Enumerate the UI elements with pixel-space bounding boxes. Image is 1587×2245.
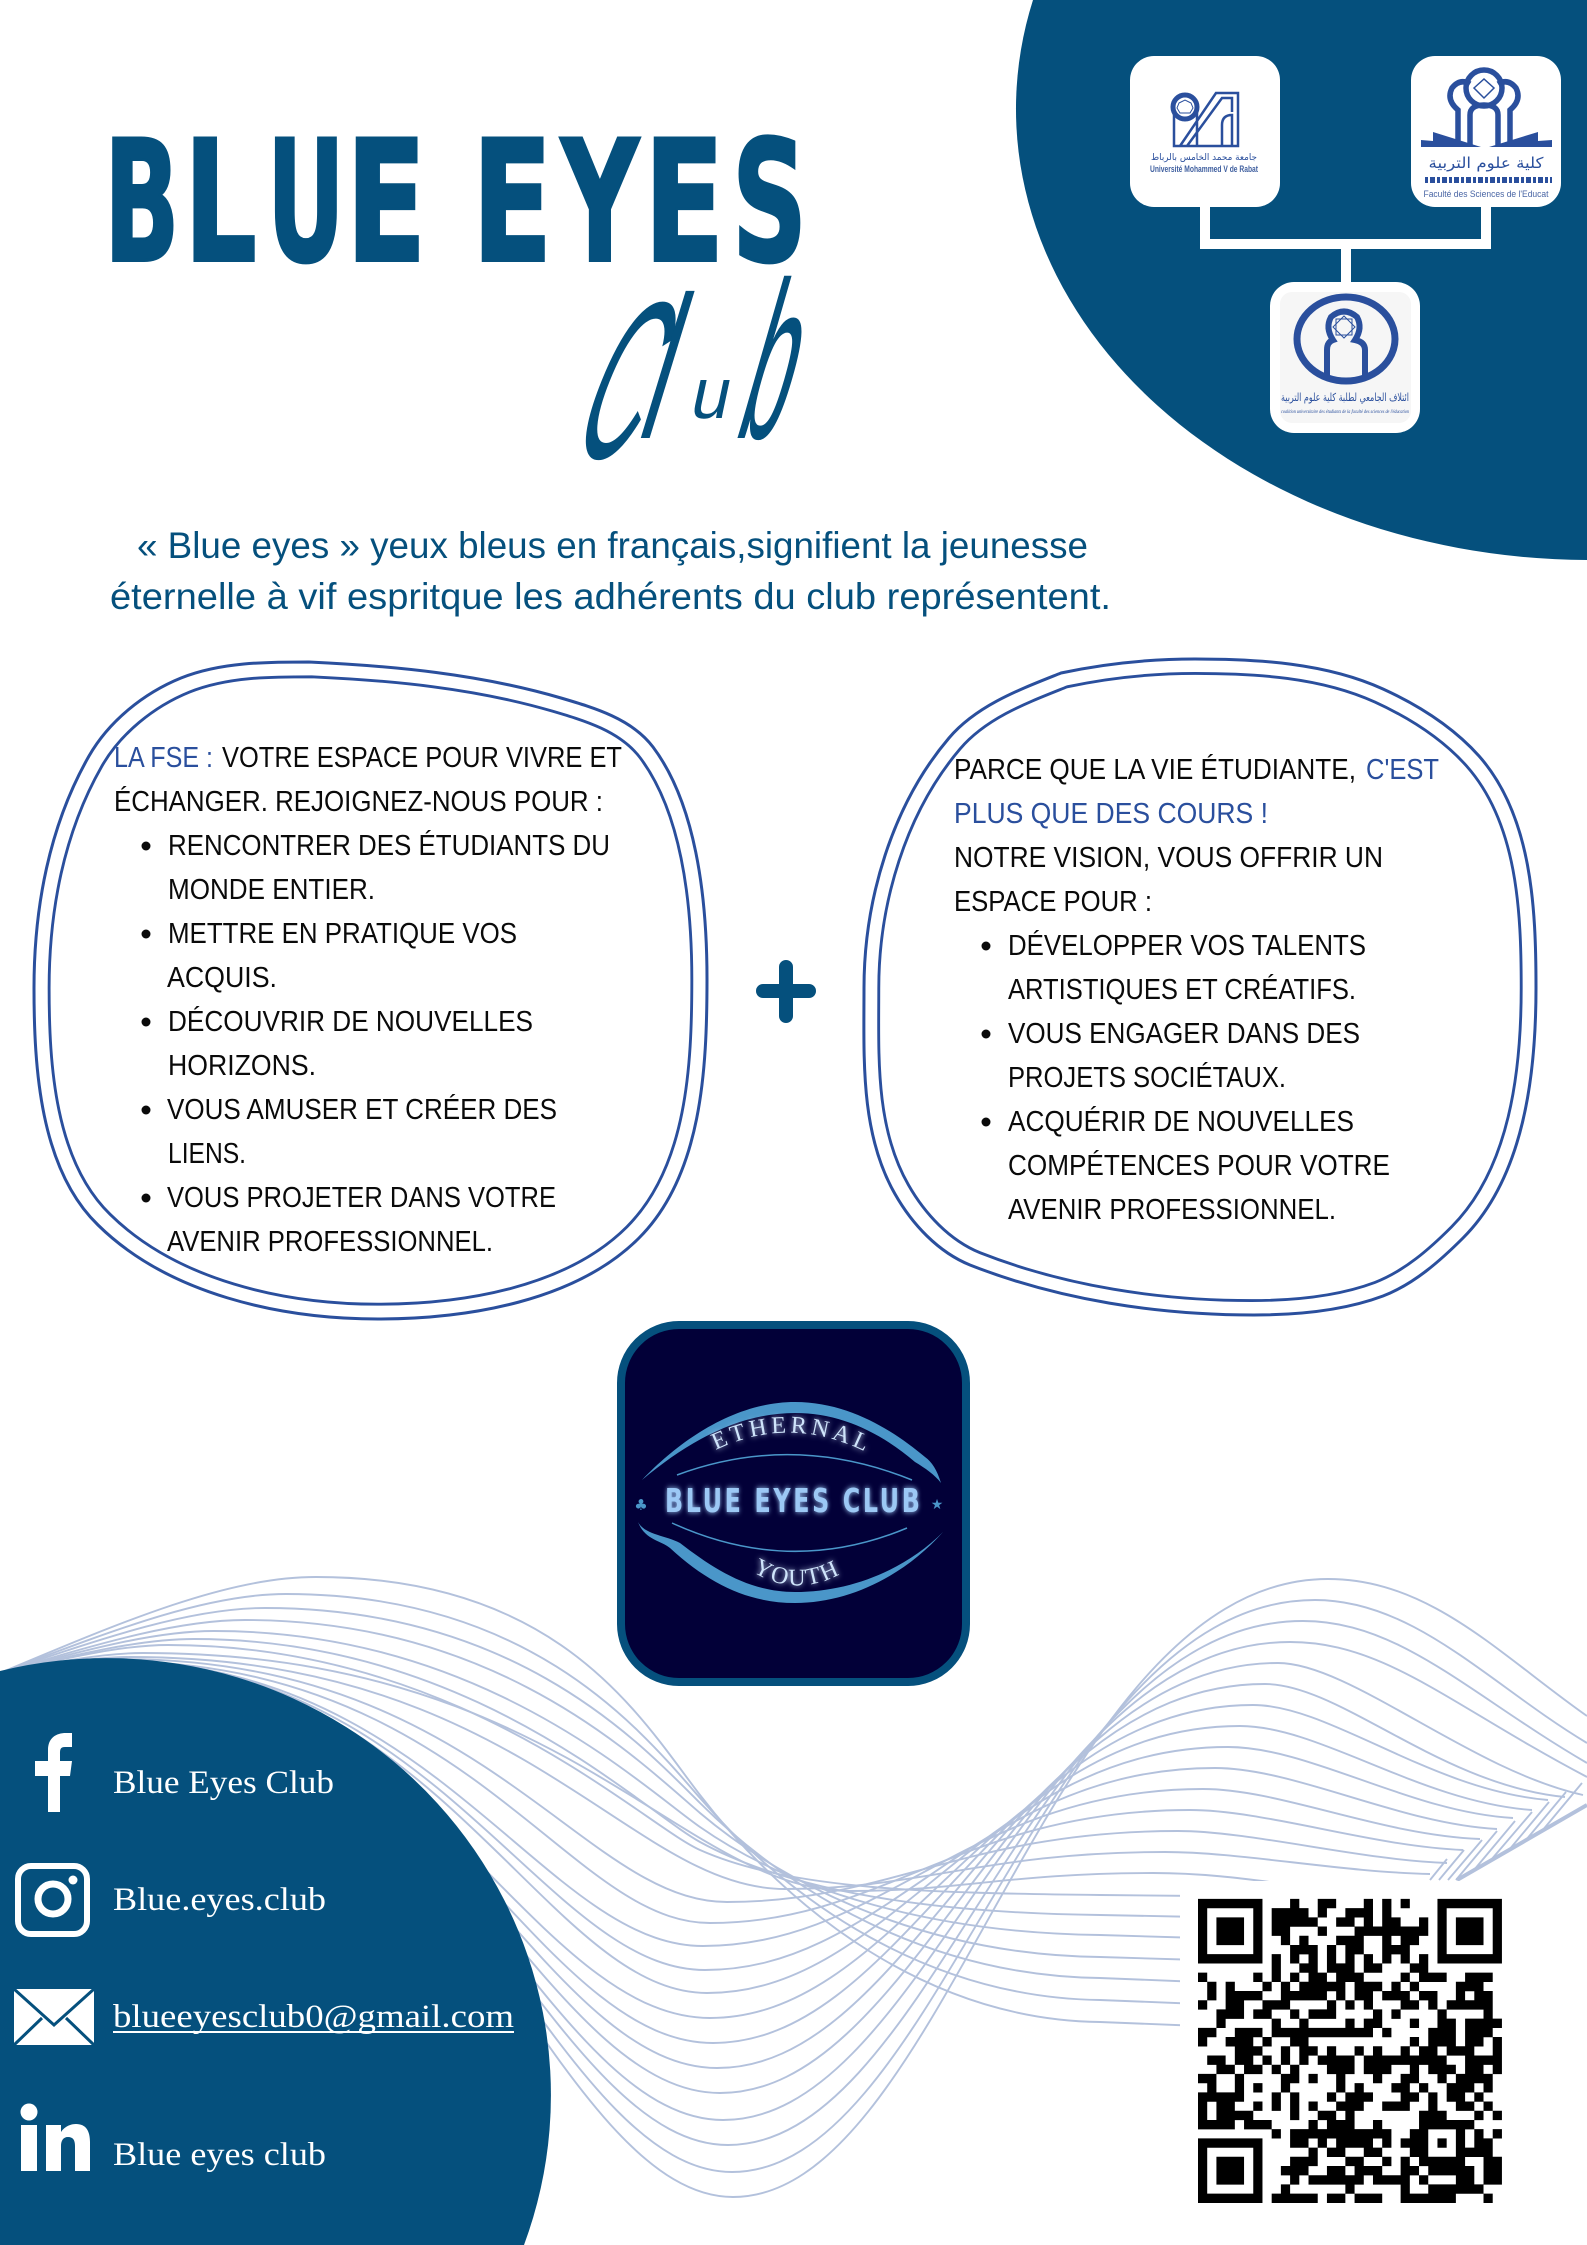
club logo: ETHERNAL [708,1413,868,1454]
panel: QR background [1180,1881,1587,2245]
logo tile: Université Mohammed V de Rabat: Université Mohammed V de Rabat [1150,164,1258,174]
panel: top right circle [1016,0,1587,560]
panel: vision blob: COMPÉTENCES POUR VOTRE [1008,1149,1390,1182]
title: S [732,104,807,300]
panel: vision blob: C'EST [1366,754,1439,786]
title: L [184,105,257,300]
logo tile: Université Mohammed V de Rabat [1130,56,1280,207]
panel: vision blob: PARCE QUE LA VIE ÉTUDIANTE, [954,753,1356,786]
panel: FSE blob: METTRE EN PRATIQUE VOS [168,918,517,950]
logo tile: coalition universitaire [1270,282,1420,433]
panel: FSE blob: AVENIR PROFESSIONNEL. [167,1226,493,1258]
panel: vision blob: PLUS QUE DES COURS ! [954,798,1268,830]
panel: FSE blob: ACQUIS. [167,962,277,994]
icon: envelope [14,1989,94,2045]
club logo: BLUE EYES CLUB [665,1481,920,1520]
title script: Club: C [547,257,710,506]
panel: vision blob [864,659,1536,1315]
title: E [346,105,426,301]
title [104,104,807,301]
logo tile: Université Mohammed V de Rabat: جامعة محمد الخامس بالرباط [1151,153,1257,163]
panel: vision blob: ACQUÉRIR DE NOUVELLES [1008,1105,1354,1138]
logo tile: Faculté des Sciences de l'Education [1411,56,1561,207]
icon: facebook [35,1733,72,1812]
title: E [644,105,724,301]
club logo: YOUTH [754,1555,842,1590]
text: facebook: Blue Eyes Club [113,1765,334,1801]
text: linkedin: Blue eyes club [113,2137,326,2173]
club logo [617,1321,970,1686]
panel: vision blob: VOUS ENGAGER DANS DES [1008,1018,1360,1050]
title script: Club: l [621,256,712,482]
logo tile: coalition universitaire: coalition universitaire des étudiants de la faculté des sciences de l'éducation [1281,410,1409,415]
panel: vision blob: PROJETS SOCIÉTAUX. [1008,1061,1286,1094]
title script: Club [547,236,837,506]
icon: linkedin [20,2104,90,2171]
title: B [104,105,180,301]
connector between logos [1205,207,1486,282]
logo tile: Faculté des Sciences de l'Education: Faculté des Sciences de l'Educat [1424,189,1549,199]
logo tile: coalition universitaire: ائتلاف الجامعي لطلبة كلية علوم التربية [1281,391,1409,404]
icon: instagram [18,1866,87,1934]
panel: FSE blob: ÉCHANGER. REJOIGNEZ-NOUS POUR : [114,785,603,818]
title script: Club: b [718,236,837,487]
wave line pattern [0,1577,1587,2197]
title: U [267,106,345,301]
club logo: ★ [931,1497,943,1513]
text: email: blueeyesclub0@gmail.com [113,1999,514,2035]
panel: FSE blob: VOUS PROJETER DANS VOTRE [167,1182,556,1214]
title: E [472,105,552,301]
panel: vision blob: DÉVELOPPER VOS TALENTS [1008,929,1366,962]
panel: vision blob: NOTRE VISION, VOUS OFFRIR UN [954,842,1383,874]
panel: vision blob: AVENIR PROFESSIONNEL. [1008,1194,1336,1226]
title: Y [559,106,640,301]
intro text: éternelle à vif espritque les adhérents du club représentent. [110,576,1111,617]
club logo: ♣ [634,1496,648,1514]
panel: FSE blob: HORIZONS. [168,1050,316,1082]
panel: FSE blob: DÉCOUVRIR DE NOUVELLES [168,1005,533,1038]
plus icon [763,967,809,1016]
panel: FSE blob: MONDE ENTIER. [168,874,375,906]
title script: Club: u [685,353,740,434]
panel: FSE blob: VOUS AMUSER ET CRÉER DES [167,1093,557,1126]
intro text [110,525,1111,617]
panel: vision blob: ARTISTIQUES ET CRÉATIFS. [1008,973,1356,1006]
QR code [1198,1904,1502,2198]
panel: social circle [0,1658,551,2245]
panel: FSE blob [34,662,707,1319]
panel: FSE blob: VOTRE ESPACE POUR VIVRE ET [222,742,622,774]
logo tile: Faculté des Sciences de l'Education: كلية علوم التربية [1428,154,1544,172]
text: instagram: Blue.eyes.club [113,1882,326,1918]
panel: FSE blob: LA FSE : [114,742,213,774]
panel: FSE blob: RENCONTRER DES ÉTUDIANTS DU [168,829,610,862]
panel: vision blob: ESPACE POUR : [954,886,1152,918]
panel: FSE blob: LIENS. [168,1138,246,1170]
intro text: « Blue eyes » yeux bleus en français,signifient la jeunesse [137,525,1088,566]
